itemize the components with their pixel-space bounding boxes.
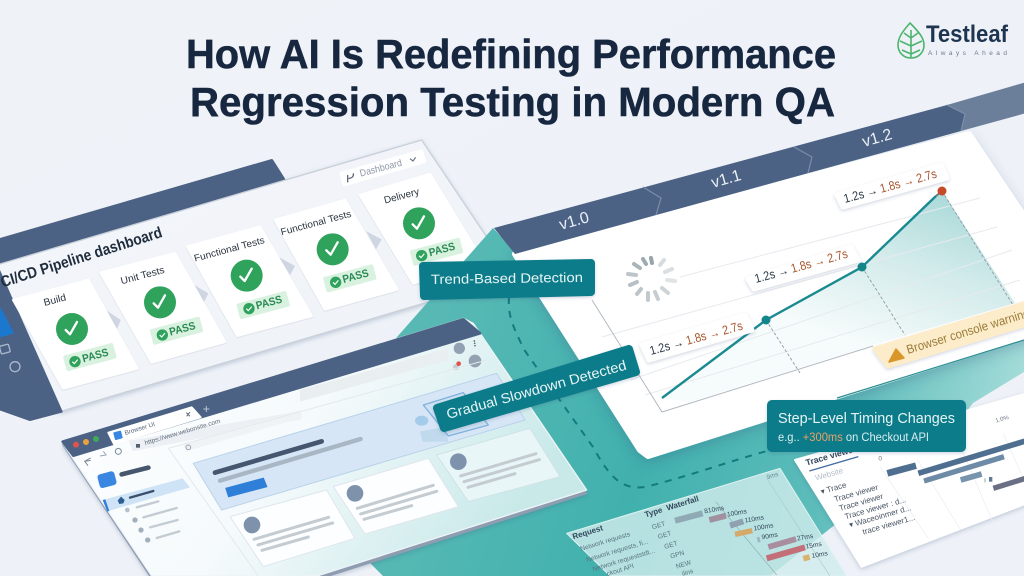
card: Unit Tests: Unit Tests [120, 265, 166, 287]
data point v1.2 [938, 186, 946, 196]
panel: waterfall network table: 100ms [753, 522, 775, 533]
version band: v1.1 [709, 167, 743, 192]
window controls [73, 436, 99, 448]
card: Build [13, 280, 137, 388]
card: Delivery [360, 174, 483, 283]
title [186, 31, 836, 125]
icon: folder [0, 344, 10, 354]
search bar [183, 410, 303, 451]
panel: waterfall network table [567, 468, 847, 576]
card: Delivery: PASS [428, 241, 457, 259]
panel: waterfall network table: Type [644, 505, 664, 519]
browser title bar [63, 319, 480, 456]
logo: Testleaf: Testleaf [926, 21, 1009, 48]
title: How AI Is Redefining Performance [186, 31, 836, 77]
data point v1.0 [762, 316, 770, 324]
arrow: unit to functional [193, 284, 208, 303]
sidebar [97, 468, 190, 543]
dashed drop lines [766, 191, 1013, 373]
panel: waterfall network table: Request [571, 523, 604, 541]
hero card [193, 373, 525, 510]
card: Unit Tests [101, 253, 225, 362]
panel: trace viewer: ▾ Trace [820, 480, 848, 496]
panel: waterfall network table: GET [657, 530, 672, 541]
card: Functional Tests: PASS [255, 294, 284, 312]
card: Unit Tests: PASS [168, 320, 197, 339]
panel: trace viewer: Trace viewer [833, 483, 880, 504]
timing label v1.2: 1.2s → 1.8s → 2.7s [842, 167, 938, 206]
dashed connector path [509, 297, 767, 487]
browser tab [108, 406, 209, 444]
panel: trace viewer: Website [814, 466, 845, 483]
panel: waterfall network table: NEW [675, 559, 693, 571]
version band: v1.0 [557, 209, 591, 234]
title: Regression Testing in Modern QA [190, 79, 835, 125]
icon: loading spinner [628, 258, 675, 300]
callout: Gradual Slowdown Detected: Gradual Slowdown Detected [445, 357, 628, 422]
trend line [662, 196, 936, 398]
arrow: build to unit [106, 310, 121, 330]
callout: Trend-Based Detection: Trend-Based Detection [431, 270, 583, 287]
data point v1.1 [858, 262, 866, 272]
panel: waterfall network table: 90ms [761, 531, 779, 541]
logo: Testleaf [898, 21, 1009, 58]
callout: Trend-Based Detection [423, 263, 591, 296]
panel: waterfall network table: Network requeststdt... [592, 548, 656, 573]
card: Delivery: Delivery [383, 187, 421, 207]
card: Functional Tests second [275, 200, 397, 309]
content card 2 [333, 458, 458, 534]
dashboard selector: Dashboard [359, 158, 403, 180]
timing label v1.0: 1.2s → 1.8s → 2.7s [648, 319, 744, 358]
chart axes [592, 300, 873, 412]
panel: waterfall network table: Network requests [580, 531, 632, 553]
panel: trace viewer: ▾ Waceoinmer d... [848, 503, 912, 530]
panel: trace viewer: Trace viewer : d... [844, 495, 907, 521]
panel: waterfall network table: 100ms [726, 508, 748, 519]
panel: waterfall network table: Network requests, fi... [586, 538, 649, 564]
panel: waterfall network table: Waterfall [665, 494, 700, 513]
panel: waterfall network table: 9ms [766, 471, 779, 481]
dashboard title: CI/CD Pipeline dashboard [0, 224, 164, 291]
icon: leaf [898, 23, 924, 58]
dashboard selector [341, 151, 425, 185]
panel: CI/CD pipeline dashboard [0, 140, 513, 420]
panel: waterfall network table: 110ms [744, 514, 765, 525]
toolbar with address bar: https://www.webonsite.com [144, 418, 221, 447]
callout: Step-Level Timing Changes: e.g.. +300ms on Checkout API [778, 432, 929, 444]
panel: browser UI [62, 318, 587, 576]
panel: waterfall network table: 15ms [805, 541, 823, 551]
panel: waterfall network table: 810ms [704, 505, 725, 515]
panel: trace viewer: Trace viewer [838, 492, 885, 513]
card: Functional Tests second: PASS [341, 267, 370, 286]
version band: v1.2 [860, 126, 894, 151]
panel: trace viewer [795, 393, 1024, 567]
panel: trace viewer: 0 [878, 456, 882, 463]
content card 3 [437, 428, 560, 502]
area under trend line [662, 191, 1015, 402]
panel: waterfall network table: GET [651, 521, 666, 531]
arrow: functional to delivery [366, 231, 382, 249]
card: Functional Tests second: Functional Tests [280, 209, 353, 238]
panel: waterfall network table: GPN [670, 550, 686, 561]
arrow: functional to functional [279, 257, 295, 275]
panel: trace viewer: trace viewer1... [861, 513, 916, 537]
logo: Testleaf: Always Ahead [928, 50, 1007, 57]
card: Build: Build [43, 292, 67, 309]
panel: waterfall network table: 27ms [796, 533, 814, 543]
version band [494, 81, 1024, 254]
teal backdrop shape [340, 228, 1024, 576]
card: Functional Tests [187, 227, 312, 336]
icon: settings gear [10, 362, 20, 372]
timing label v1.1: 1.2s → 1.8s → 2.7s [753, 247, 849, 286]
panel: trace viewer: Trace viewer [804, 443, 858, 468]
panel: waterfall network table: 10ms [811, 550, 829, 560]
panel: trace viewer: 1.0% [995, 415, 1010, 425]
card: Build: PASS [81, 347, 110, 365]
callout: Step-Level Timing Changes: Step-Level Timing Changes [778, 411, 955, 427]
content card 1 [230, 490, 355, 567]
panel: regression trend chart [494, 81, 1024, 456]
light area bottom right [770, 470, 1024, 576]
callout: Step-Level Timing Changes [767, 400, 966, 452]
card: Functional Tests: Functional Tests [193, 235, 266, 265]
panel: waterfall network table: GET [664, 540, 679, 551]
callout: browser console warning [875, 299, 1024, 366]
browser tab: Browser UI [124, 421, 156, 437]
toolbar with address bar [85, 340, 481, 466]
